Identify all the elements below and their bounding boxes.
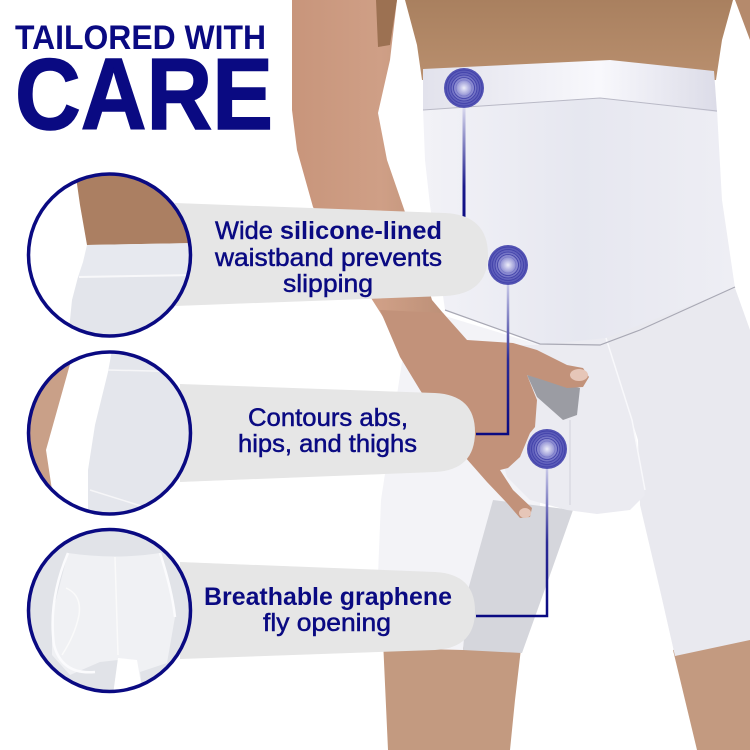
detail circle: fly opening close-up — [28, 530, 190, 695]
callout shape — [175, 203, 488, 306]
callout text — [238, 404, 417, 458]
callout shape — [180, 384, 475, 482]
callout shape — [180, 562, 475, 659]
callout: contours — [180, 384, 475, 482]
callout text: Contours abs, — [248, 404, 408, 432]
callout: waistband — [175, 203, 488, 306]
title: TAILORED WITH — [15, 19, 266, 57]
hand — [380, 310, 589, 518]
callout text: Wide silicone-lined — [215, 217, 442, 245]
inner thigh shadow — [463, 500, 573, 653]
waist panel of garment — [423, 98, 735, 345]
thumb nail — [570, 369, 588, 381]
right leg of shorts — [606, 288, 750, 656]
connector line: contours — [476, 285, 508, 434]
hotspot: fly — [527, 429, 567, 469]
detail circle: waistband close-up — [28, 170, 195, 340]
hotspot: waistband — [444, 68, 484, 108]
bare legs — [383, 640, 522, 750]
connector line: waistband — [462, 108, 466, 220]
callout: fly opening — [180, 562, 475, 659]
connector line: fly opening — [476, 469, 547, 616]
waist seam — [445, 287, 735, 345]
upper arm — [292, 0, 470, 420]
photo: model wearing white compression shorts — [292, 0, 750, 750]
detail circle: contours close-up — [20, 350, 195, 515]
hotspot: abdomen — [488, 245, 528, 285]
finger nail — [519, 508, 531, 518]
front pouch — [470, 338, 645, 514]
shadow under thumb — [527, 375, 580, 420]
callout text: waistband prevents — [214, 244, 442, 272]
callout text: Breathable graphene — [204, 583, 452, 611]
title: CARE — [15, 39, 273, 151]
callout text — [204, 583, 452, 637]
callout text: slipping — [283, 270, 373, 298]
left leg of shorts — [377, 316, 540, 650]
callout text: hips, and thighs — [238, 430, 417, 458]
silicone waistband — [423, 60, 717, 112]
far arm edge — [735, 0, 750, 40]
arm shadow patch — [376, 0, 397, 47]
torso skin — [405, 0, 733, 80]
callout text: fly opening — [263, 609, 391, 637]
callout text — [214, 217, 442, 298]
